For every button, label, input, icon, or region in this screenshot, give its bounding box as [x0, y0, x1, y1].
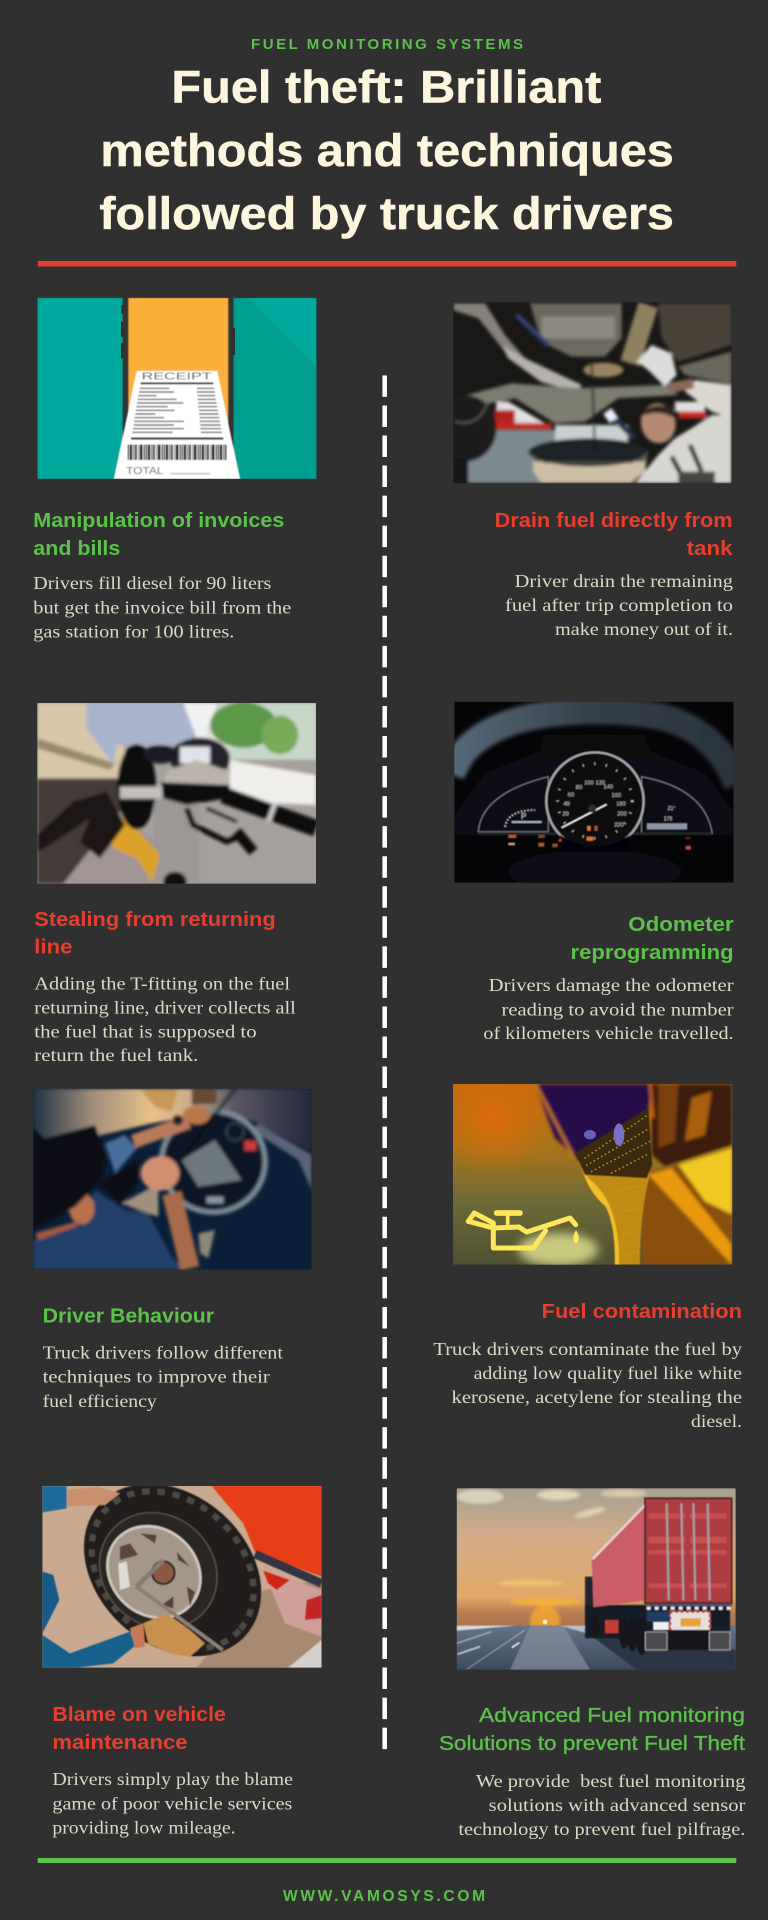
body text: providing low mileage.	[52, 1817, 236, 1837]
photo: changing a tyre	[42, 1486, 322, 1668]
photo: receipt illustration: TOTAL	[126, 466, 164, 477]
panel: driver behaviour	[33, 1089, 312, 1411]
heading	[570, 913, 734, 964]
heading: Odometer	[628, 913, 734, 936]
body text: reading to avoid the number	[502, 1000, 734, 1020]
photo: dashboard odometer	[454, 702, 734, 883]
photo: pouring oil with warning icon	[453, 1084, 732, 1265]
body text: but get the invoice bill from the	[33, 598, 291, 618]
photo: dashboard odometer: 160	[612, 793, 621, 799]
heading	[33, 509, 284, 560]
photo: container truck at sunset	[456, 1488, 736, 1670]
body text: technology to prevent fuel pilfrage.	[458, 1819, 745, 1839]
dashed center divider	[382, 375, 387, 1749]
panel: stealing from returning line	[34, 702, 316, 1065]
body text: Adding the T-fitting on the fuel	[34, 973, 290, 993]
main title: methods and techniques	[100, 125, 674, 176]
body text	[505, 571, 733, 639]
photo: dashboard odometer: 200	[617, 812, 627, 818]
main title: Fuel theft: Brilliant	[171, 62, 601, 113]
body text: make money out of it.	[555, 619, 733, 639]
photo: dashboard odometer: 175	[664, 816, 673, 822]
panel: fuel contamination	[433, 1061, 742, 1431]
body text: diesel.	[691, 1411, 742, 1431]
body text: gas station for 100 litres.	[33, 622, 234, 642]
heading: tank	[687, 537, 733, 560]
body text: Driver drain the remaining	[515, 571, 733, 591]
green footer rule	[38, 1858, 736, 1863]
body text	[483, 975, 734, 1043]
heading: Fuel contamination	[542, 1300, 742, 1323]
heading: line	[34, 936, 72, 958]
body text: Truck drivers follow different	[43, 1342, 283, 1362]
photo: dashboard odometer: 21°	[668, 806, 676, 812]
panel: odometer reprogramming	[452, 702, 737, 1043]
heading: Driver Behaviour	[43, 1304, 214, 1328]
heading: Drain fuel directly from	[495, 509, 733, 532]
heading	[34, 908, 276, 958]
body text: kerosene, acetylene for stealing the	[452, 1387, 742, 1407]
panel: drain fuel	[433, 302, 733, 639]
heading	[439, 1704, 745, 1755]
body text: fuel after trip completion to	[505, 595, 733, 615]
heading: reprogramming	[570, 941, 734, 964]
body text: the fuel that is supposed to	[34, 1022, 257, 1042]
body text: of kilometers vehicle travelled.	[483, 1023, 734, 1043]
body text: Drivers fill diesel for 90 liters	[33, 573, 271, 593]
photo: truck driver at wheel	[33, 1088, 312, 1270]
heading: Advanced Fuel monitoring	[479, 1704, 745, 1727]
photo: dashboard odometer: 140	[604, 784, 613, 790]
body text: fuel efficiency	[43, 1391, 157, 1411]
panel: advanced fuel monitoring	[439, 1488, 745, 1839]
body text	[34, 973, 296, 1065]
body text: return the fuel tank.	[34, 1045, 198, 1065]
heading: Blame on vehicle	[52, 1703, 226, 1726]
photo: dashboard odometer: 40	[563, 802, 570, 808]
panel: blame on vehicle maintenance	[42, 1448, 322, 1837]
body text: Drivers damage the odometer	[489, 975, 734, 995]
heading: maintenance	[52, 1731, 188, 1754]
photo: fuel nozzle	[37, 703, 316, 884]
body text	[433, 1339, 742, 1431]
body text: returning line, driver collects all	[34, 998, 296, 1018]
photo: dashboard odometer: 180	[616, 802, 626, 808]
body text	[458, 1771, 745, 1839]
photo: mechanic under truck	[453, 302, 732, 484]
icon: oil can warning light	[468, 1213, 578, 1248]
eyebrow label: FUEL MONITORING SYSTEMS	[251, 36, 523, 53]
main title	[99, 62, 674, 239]
main title: followed by truck drivers	[99, 188, 674, 239]
panel: manipulation of invoices	[33, 298, 317, 642]
body text	[52, 1769, 293, 1837]
photo: dashboard odometer: 80	[576, 785, 582, 791]
heading: and bills	[33, 537, 120, 560]
heading	[52, 1703, 226, 1754]
photo: dashboard odometer: 100	[584, 780, 594, 786]
photo: dashboard odometer: 220	[614, 822, 624, 828]
body text	[33, 573, 291, 642]
photo: dashboard odometer: P	[521, 812, 526, 821]
footer url: WWW.VAMOSYS.COM	[283, 1888, 485, 1905]
heading: Stealing from returning	[34, 908, 276, 931]
body text	[43, 1342, 283, 1411]
body text: We provide best fuel monitoring	[476, 1771, 745, 1791]
photo: receipt illustration: RECEIPT	[142, 371, 213, 382]
photo: receipt illustration	[37, 298, 317, 479]
heading	[495, 509, 733, 560]
red header rule	[38, 261, 736, 266]
photo: dashboard odometer: 120	[596, 780, 605, 786]
body text: techniques to improve their	[43, 1367, 270, 1387]
body text: game of poor vehicle services	[52, 1793, 292, 1813]
body text: solutions with advanced sensor	[489, 1795, 745, 1815]
header	[99, 36, 674, 239]
photo: dashboard odometer: 60	[568, 792, 574, 798]
body text: adding low quality fuel like white	[474, 1363, 742, 1383]
body text: Drivers simply play the blame	[52, 1769, 293, 1789]
body text: Truck drivers contaminate the fuel by	[433, 1339, 742, 1359]
photo: dashboard odometer: 20	[562, 812, 569, 818]
heading: Manipulation of invoices	[33, 509, 284, 532]
heading: Solutions to prevent Fuel Theft	[439, 1732, 745, 1755]
